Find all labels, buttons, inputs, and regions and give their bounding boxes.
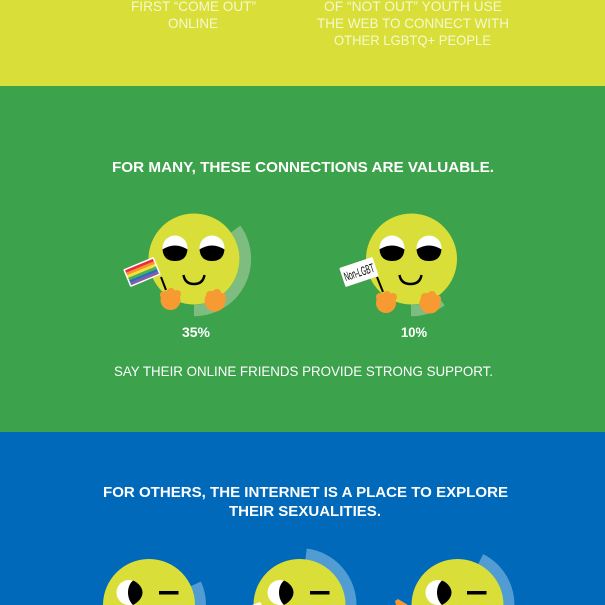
panel: exploring sexualities (0, 432, 605, 605)
eyes (380, 236, 442, 261)
label: 10%: 10% (401, 324, 428, 340)
orange hand tip (395, 599, 408, 605)
chart: 35 percent emoji with rainbow flag (123, 214, 245, 312)
eye (426, 580, 452, 605)
flag pole (161, 277, 166, 290)
left hand (160, 288, 181, 310)
smile (184, 275, 204, 284)
face (254, 559, 346, 605)
panel: coming out online (0, 0, 605, 86)
progress arc (196, 584, 200, 605)
heading: explore sexualities (103, 484, 508, 520)
face (412, 559, 504, 605)
rainbow flag (123, 257, 161, 287)
panel: valuable connections (0, 86, 605, 432)
eye (268, 580, 294, 605)
progress arc (480, 560, 508, 605)
face (366, 214, 457, 304)
label: 35%: 35% (182, 324, 211, 340)
eyes (162, 236, 224, 261)
right hand (204, 289, 226, 312)
sign pole (377, 277, 383, 292)
text block: online friends support: SAY THEIR ONLINE FRIENDS PROVIDE STRONG SUPPORT. (114, 363, 493, 379)
right hand (420, 291, 441, 314)
text block: not out youth: THE WEB TO CONNECT WITH (317, 15, 509, 31)
wink (467, 591, 486, 594)
emoji 2: winking with long arc (252, 554, 350, 605)
chart: 10 percent emoji with non-LGBT sign (339, 214, 457, 314)
face (148, 214, 240, 304)
progress arc 10% (411, 301, 441, 311)
heading: explore sexualities: FOR OTHERS, THE INTERNET IS A PLACE TO EXPLORE (103, 484, 508, 501)
wink (310, 591, 330, 594)
left hand (376, 291, 397, 313)
emoji 1: winking with short arc (103, 559, 200, 605)
progress arc 35% (194, 229, 245, 310)
smile (400, 275, 422, 284)
sign: Non-LGBT (342, 261, 376, 284)
wink (159, 591, 178, 594)
text block: first come out online: ONLINE (168, 15, 218, 31)
progress arc (306, 554, 350, 605)
text block: not out youth (317, 0, 509, 48)
heading: connections are valuable: FOR MANY, THESE CONNECTIONS ARE VALUABLE. (112, 159, 494, 176)
white sign tip (252, 602, 262, 605)
emoji 3: winking with medium arc (395, 559, 508, 605)
text block: first come out online (131, 0, 256, 31)
heading: explore sexualities: THEIR SEXUALITIES. (229, 503, 381, 520)
eye (116, 580, 142, 605)
face (103, 559, 195, 605)
text block: not out youth: OTHER LGBTQ+ PEOPLE (334, 32, 491, 48)
